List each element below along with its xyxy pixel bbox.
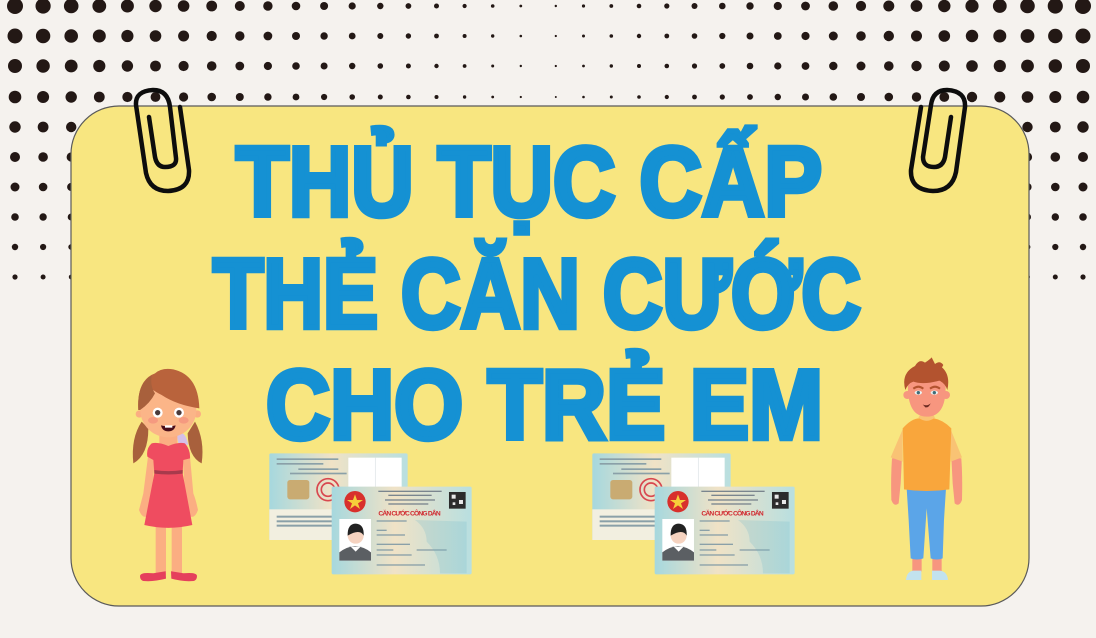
back of ID card [269, 453, 408, 540]
title: THẺ CĂN CƯỚC [213, 238, 861, 348]
title [213, 126, 861, 460]
illustration: girl [133, 369, 202, 581]
front of ID card: CĂN CƯỚC CÔNG DÂN [701, 508, 764, 517]
icon: left paperclip [136, 90, 189, 191]
back of ID card [592, 453, 731, 540]
front of ID card [332, 487, 472, 574]
title: THỦ TỤC CẤP [236, 126, 822, 236]
panel: yellow card [71, 106, 1029, 606]
front of ID card: CĂN CƯỚC CÔNG DÂN [378, 508, 441, 517]
icon: right paperclip [911, 90, 965, 191]
halftone dot background [7, 0, 1091, 280]
illustration: left ID cards [269, 453, 472, 574]
illustration: right ID cards [592, 453, 795, 574]
title: CHO TRẺ EM [266, 350, 823, 460]
front of ID card [655, 487, 795, 574]
illustration: boy [891, 357, 962, 580]
